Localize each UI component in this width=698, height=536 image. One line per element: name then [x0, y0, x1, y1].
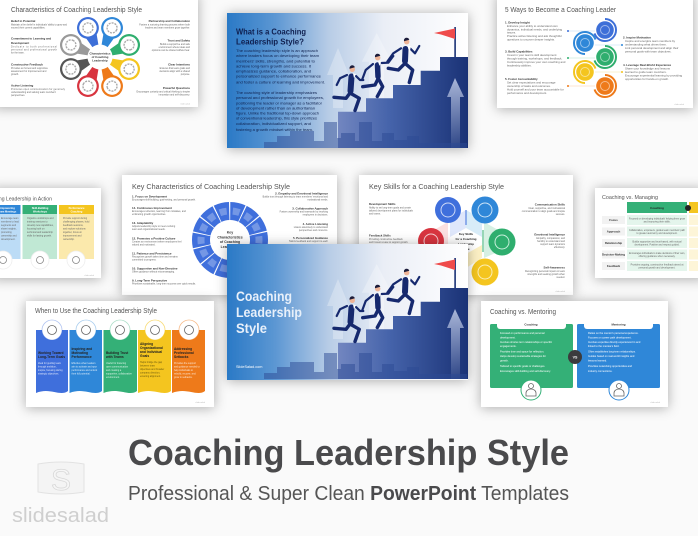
- blue column: members to lead: [1, 220, 19, 224]
- column: long-term goals: Ideal for guiding team: [38, 362, 61, 365]
- right skills: needed.: [556, 276, 565, 279]
- right labels: decisions align with a shared: [159, 70, 191, 73]
- cover website: SlideSalad.com: [236, 365, 262, 369]
- left list: 11. Patience and Persistence: [132, 252, 172, 256]
- right labels: purpose.: [181, 73, 190, 76]
- column: long-term goals: inspire, focusing during: [38, 369, 63, 372]
- slidesalad logo: [12, 462, 109, 527]
- column: inspiring performance: Inspiring and: [72, 347, 92, 351]
- coaching panel: Tailored to specific goals or challenges.: [500, 364, 545, 368]
- blue column: promoting: [1, 231, 12, 234]
- hexagon skill diagram: [418, 196, 516, 286]
- left steps: ownership of tasks and outcomes.: [507, 84, 551, 88]
- cover title: [236, 289, 302, 336]
- heading: Leadership Style?: [236, 36, 304, 46]
- column: aligning goals: and Individual: [140, 350, 162, 354]
- left labels: assessment for improvement and: [11, 70, 47, 73]
- comparison table: Provides ongoing, constructive feedback aimed at: [631, 264, 684, 266]
- green column: Workshops: [33, 210, 48, 214]
- left labels: Maintain a firm belief in individuals' ability to grow and: [11, 24, 68, 26]
- body text: of conventional leadership, this style prioritizes: [236, 116, 317, 120]
- right list: 3. Collaborative Approach: [292, 206, 328, 210]
- column: building trust: [104, 320, 137, 393]
- comparison table: Encourages individuals to make decisions of their own,: [629, 252, 685, 255]
- column: professional setbacks: [172, 320, 205, 393]
- right skills: success.: [556, 213, 565, 216]
- slide title: Coaching vs. Managing: [602, 195, 658, 201]
- left list: Encourages reflection, learning from mistakes, and: [132, 210, 186, 213]
- column: inspiring performance: Motivating: [72, 351, 88, 355]
- left list: Prioritizes sustainable, long-term success over quick results.: [132, 282, 196, 286]
- mentoring panel: Guides based on real-world insights and: [588, 354, 635, 358]
- column: professional setbacks: Setbacks: [174, 355, 189, 359]
- column: aligning goals: Goals: [140, 354, 149, 358]
- yellow column: challenging phases, hold: [63, 220, 90, 224]
- left list: embracing growth opportunities.: [132, 213, 166, 216]
- coaching panel: Coaching: [524, 322, 538, 326]
- left labels: for the team.: [11, 52, 25, 54]
- column: building trust: open communication: [106, 366, 129, 368]
- left skills: Feedback Skills: [369, 234, 391, 238]
- column: building trust: Useful for fostering: [106, 362, 127, 365]
- mentoring panel: linked to the mentee's field.: [588, 344, 620, 348]
- left skills: Providing constructive feedback: [369, 238, 404, 241]
- body text: members' skills, strengths, and potential to: [236, 58, 315, 63]
- left list: [132, 194, 196, 286]
- right steps: 2. Inspire Motivation: [623, 36, 651, 40]
- cover title: Leadership: [236, 305, 302, 320]
- slide title: When to Use the Coaching Leadership Style: [35, 308, 157, 315]
- segmented wheel: Characteristics: [217, 236, 243, 240]
- left list: Adjusts leadership style to meet evolving: [132, 225, 176, 228]
- hexagon skill diagram: for a Coaching: [455, 237, 477, 241]
- left labels: [11, 19, 68, 97]
- comparison table: to greater autonomy and development.: [636, 232, 678, 235]
- coaching panel: Provides time and space for reflection.: [500, 350, 544, 354]
- right labels: Powerful Questions: [163, 86, 190, 90]
- column: long-term goals: Working Toward: [38, 351, 64, 355]
- comparison table: Collaborative, empowers, guides team members' path: [629, 229, 686, 232]
- left skills: tailored development plans for individuals: [369, 210, 414, 212]
- slide: five ways to become a coaching leader: slidesalad: [674, 104, 685, 106]
- left labels: Development: [11, 41, 29, 45]
- coaching panel: [490, 320, 573, 400]
- left steps: dynamics, individual needs, and underlying: [507, 28, 563, 32]
- comparison table: Builds supportive and trust-based, with mutual: [633, 240, 682, 244]
- right skills: Self-Awareness: [544, 266, 565, 270]
- mentoring panel: Provides networking opportunities and: [588, 364, 633, 368]
- right skills: Empathy, compassion, and: [536, 237, 566, 240]
- segmented wheel: Key: [227, 230, 233, 234]
- yellow column: improvement and: [63, 234, 82, 238]
- slide: when to use the coaching leadership style: slidesalad: [195, 402, 206, 404]
- radial diagram: Leadership: [92, 58, 108, 62]
- body text: achieve long-term growth and success. It: [236, 63, 312, 68]
- left list: 13. Adaptability: [132, 221, 154, 225]
- coaching panel: Involves shorter-term relationships or specific: [500, 340, 553, 344]
- right skills: Emotional Intelligence: [534, 232, 565, 236]
- right skills: Recognizing personal impact on team: [525, 270, 565, 273]
- right list: 5. Personalized Guidance: [293, 236, 328, 240]
- left labels: Constructive Feedback: [11, 62, 43, 66]
- column: building trust: with Teams: [105, 355, 124, 359]
- column: aligning goals: Organizational: [140, 346, 163, 350]
- right list: Builds trust through listening to team members' emotional and: [263, 196, 329, 198]
- right list: [263, 192, 329, 243]
- right skills: effectively.: [554, 246, 565, 249]
- slide: when to use the coaching leadership style: [26, 301, 214, 407]
- mentoring panel: [577, 320, 660, 400]
- right labels: Trust and Safety: [168, 38, 190, 42]
- green column: develop new capabilities,: [27, 224, 54, 227]
- body text: emphasizes guidance, collaboration, and: [236, 68, 311, 74]
- hexagon skill diagram: Key Skills: [459, 232, 473, 236]
- column: aligning goals: objectives and broader: [140, 368, 164, 371]
- right labels: leaders and team members grow together.: [145, 26, 190, 30]
- column: aligning goals: [138, 320, 171, 393]
- green column: skills for lasting growth.: [27, 234, 52, 238]
- left steps: through training, workshops, and feedback.: [507, 56, 562, 60]
- slide: key characteristics of coaching leadership: [122, 175, 337, 295]
- column: inspiring performance: performance and unlock: [72, 369, 98, 372]
- blue column: Encourage team: [1, 217, 19, 220]
- slidesalad logo: S: [51, 464, 71, 497]
- right labels: [136, 19, 191, 96]
- right steps: [623, 36, 682, 81]
- subtitle: Professional & Super Clean PowerPoint Templates: [128, 483, 569, 505]
- left steps: 3. Build Capabilities: [505, 50, 533, 54]
- left labels: Promotes open communication for genuinely: [11, 88, 66, 91]
- right steps: Inspire and energize team members by: [625, 39, 676, 43]
- left steps: Enhance your ability to understand own: [507, 24, 558, 28]
- yellow column: [59, 205, 94, 269]
- right list: 4. Active Listening: [303, 222, 328, 226]
- right labels: Encourages curiosity and critical thinking to inspire: [136, 90, 191, 94]
- green column: training sessions to: [27, 220, 48, 224]
- left steps: Practice active listening and ask thoughtful: [507, 34, 562, 38]
- right skills: Clear, supportive, and motivational: [528, 207, 565, 210]
- column: professional setbacks: Addressing: [174, 347, 192, 351]
- left skills: [369, 202, 414, 244]
- column: building trust: environment.: [106, 376, 120, 379]
- slide: key skills for a coaching leadership style: slidesalad: [555, 291, 566, 293]
- blue column: segments and: [1, 224, 17, 227]
- slidesalad logo: slidesalad: [12, 505, 109, 527]
- left list: team and organizational needs.: [132, 228, 166, 231]
- body text: fostering a growth mindset within the team.: [236, 127, 313, 132]
- left steps: Set clear expectations and encourage: [507, 80, 556, 84]
- left list: Recognizes growth takes time and remains: [132, 256, 179, 258]
- slide: coaching vs mentoring: [481, 301, 668, 407]
- column: inspiring performance: Performance: [72, 355, 92, 359]
- slide title: Characteristics of Coaching Leadership Style: [11, 7, 142, 14]
- column: long-term goals: Long-Term Goals: [38, 355, 65, 359]
- column: professional setbacks: rebuild, recover, and: [174, 372, 196, 376]
- right steps: Link personal development and align their: [625, 46, 679, 50]
- slide: key skills for a coaching leadership style: [359, 175, 573, 295]
- comparison table: personal growth and development.: [639, 266, 676, 270]
- yellow column: Performance: [69, 206, 85, 210]
- green column: focusing both on: [27, 228, 45, 230]
- column: aligning goals: between team: [140, 364, 155, 368]
- left labels: Active Listening: [11, 84, 34, 88]
- left labels: Belief in Potential: [11, 19, 35, 23]
- vs badge: VS: [573, 356, 578, 360]
- column: aligning goals: Aligning: [140, 342, 153, 346]
- left steps: performance and development.: [507, 91, 547, 95]
- right list: Tailors feedback and support to each: [289, 240, 329, 243]
- left list: 9. Long-Term Perspective: [132, 278, 168, 282]
- yellow column: Provide support during: [63, 217, 88, 220]
- comparison table: and improving their skills.: [644, 220, 671, 224]
- slide: what is a coaching leadership style: [227, 13, 468, 148]
- right labels: Clear Intentions: [168, 62, 190, 66]
- slide: characteristics of coaching leadership: [0, 0, 198, 107]
- radial diagram: Characteristics: [90, 52, 111, 56]
- right steps: learned to guide team members.: [625, 70, 667, 74]
- yellow column: together, focus on: [63, 231, 83, 234]
- segmented wheel: Leadership: [221, 245, 239, 249]
- body text: The coaching leadership style is an approach: [236, 48, 318, 53]
- left labels: personal and professional growth: [11, 48, 58, 52]
- comparison table: development. Positive and respect guided.: [634, 244, 680, 246]
- right list: Fosters ownership and teamwork by involving: [280, 210, 329, 214]
- right steps: Encourage experiential learning by providing: [625, 74, 682, 78]
- chain of circles: [567, 19, 623, 97]
- stair climbing illustration: [264, 27, 468, 148]
- right steps: opportunities for hands-on growth.: [625, 77, 669, 81]
- left labels: Dedicate to both professional: [11, 46, 57, 48]
- slide title: 5 Ways to Become a Coaching Leader: [505, 7, 617, 14]
- green column: Organize workshops and: [27, 217, 54, 220]
- comparison table: [602, 202, 698, 271]
- left steps: 1. Develop Insight: [505, 20, 530, 24]
- green column: Skill-Building: [32, 206, 49, 210]
- right skills: support team dynamics: [540, 243, 566, 246]
- left steps: questions to uncover deeper insights.: [507, 37, 555, 41]
- column: professional setbacks: Provides the support: [174, 362, 196, 365]
- mentoring panel: Involves expertise directly experienced in and: [588, 340, 641, 344]
- left steps: leadership abilities.: [507, 64, 532, 68]
- left steps: Invest in your team's skill development: [507, 53, 557, 57]
- main title: Coaching Leadership Style: [128, 432, 569, 473]
- green column: [22, 205, 57, 269]
- left list: 12. Promotes a Positive Culture: [132, 236, 176, 240]
- right skills: humility to understand and: [537, 240, 566, 243]
- coaching panel: engagements.: [500, 344, 517, 348]
- green column: technical and leadership: [27, 231, 53, 234]
- body text: where leaders focus on developing their team: [236, 53, 319, 58]
- blue column: share insights,: [1, 228, 17, 230]
- right steps: Share your knowledge and lessons: [625, 66, 671, 70]
- right list: 2. Empathy and Emotional Intelligence: [275, 192, 328, 196]
- body text: personalized support to enhance performance: [236, 74, 321, 78]
- coaching panel: Helps develop sustainable strategies for: [500, 354, 546, 358]
- mentoring panel: Relies on the mentor's personal experience.: [588, 331, 639, 335]
- left labels: perspectives.: [11, 94, 25, 97]
- right steps: understanding what drives them.: [625, 42, 667, 46]
- coaching panel: Encourages skill-building and self-discovery.: [500, 369, 551, 373]
- coaching panel: development.: [500, 336, 516, 340]
- left labels: exceed their current capabilities.: [11, 26, 46, 30]
- slide title: Key Characteristics of Coaching Leadership Style: [132, 184, 290, 191]
- mentoring panel: lessons learned.: [588, 358, 607, 362]
- right skills: Communication Skills: [535, 202, 565, 206]
- mentoring panel: Mentoring: [612, 322, 626, 326]
- slide: coaching vs managing: [595, 188, 698, 278]
- comparison table: Coaching: [650, 206, 664, 210]
- radial diagram: [58, 15, 142, 99]
- mentoring panel: Often establishes long-term relationships.: [588, 350, 636, 354]
- column: professional setbacks: and guidance needed to: [174, 366, 200, 368]
- comparison table: Focus: [609, 218, 618, 222]
- left skills: and teams.: [369, 212, 381, 216]
- right skills: [522, 202, 566, 279]
- column: long-term goals: through ambition,: [38, 366, 57, 368]
- column: professional setbacks: Professional: [174, 351, 194, 355]
- right steps: 4. Leverage Real-World Experience: [623, 63, 672, 67]
- left list: 14. Continuous Improvement: [132, 206, 172, 210]
- column: long-term goals: [36, 320, 68, 393]
- column: aligning goals: company direction,: [140, 372, 160, 374]
- right skills: strengths and seeking growth when: [527, 273, 566, 276]
- column: inspiring performance: [70, 320, 102, 393]
- left labels: growth.: [11, 73, 19, 76]
- slide title: Key Skills for a Coaching Leadership Style: [369, 184, 504, 191]
- body text: and foster a culture of learning and improvement.: [236, 80, 325, 84]
- radial diagram: of Coaching: [92, 55, 109, 59]
- right list: perspectives and concerns.: [299, 229, 328, 232]
- yellow column: ownership.: [63, 238, 75, 241]
- right steps: personal goals with team objectives.: [625, 50, 672, 54]
- segmented wheel: [195, 205, 265, 275]
- left list: Encourages skill-building, goal-setting, and personal growth.: [132, 198, 196, 202]
- vs badge: [568, 350, 582, 364]
- right skills: communication to align goals and inspire: [522, 210, 566, 213]
- column: inspiring performance: their full potential.: [72, 372, 91, 376]
- heading: What is a Coaching: [236, 26, 306, 36]
- body text: positioning the leader or manager as a facilitator: [236, 100, 323, 106]
- left labels: Provides an honest and supportive: [11, 67, 48, 70]
- slide: characteristics of coaching leadership: slidesalad: [180, 104, 191, 106]
- column: building trust: Building Trust: [106, 351, 129, 355]
- column: long-term goals: strategic objectives.: [38, 372, 59, 376]
- right labels: Fosters a nurturing learning process where both: [139, 24, 191, 26]
- column: aligning goals: ensuring alignment.: [140, 375, 161, 378]
- heading: [236, 26, 306, 46]
- left skills: Ability to set long-term goals and create: [369, 206, 412, 210]
- left list: committed to progress.: [132, 258, 157, 262]
- body text: [236, 48, 325, 132]
- cover title: Coaching: [236, 289, 292, 304]
- stair climbing illustration: [264, 258, 468, 379]
- column: professional setbacks: grow in setbacks.: [174, 376, 193, 379]
- left skills: and honest review to support growth.: [369, 241, 409, 244]
- right labels: Builds a supportive and safe: [160, 43, 191, 46]
- left steps: issues.: [507, 30, 516, 34]
- coaching panel: Focused on performance and personal: [500, 331, 545, 335]
- slide: cover: [227, 244, 468, 380]
- right list: Listens attentively to understand: [294, 226, 329, 229]
- right list: employees in decisions.: [303, 214, 328, 216]
- blue column: ownership and: [1, 234, 17, 238]
- mentoring panel: Focuses on career path development.: [588, 336, 632, 340]
- body text: figure. Unlike the traditional top-down approach: [236, 110, 319, 116]
- comparison table: offering guidance when necessary.: [639, 255, 676, 258]
- left steps: [505, 20, 566, 95]
- left steps: 5. Foster Accountability: [505, 77, 538, 81]
- coaching panel: growth.: [500, 358, 509, 362]
- right labels: innovation and self-discovery.: [159, 94, 190, 96]
- left list: Creates an environment where employees feel: [132, 240, 182, 244]
- body text: personal and professional growth for employees,: [236, 95, 324, 100]
- left labels: Commitment to Learning and: [11, 36, 51, 40]
- column: inspiring performance: aim to activate and spur: [72, 366, 97, 368]
- body text: The coaching style of leadership emphasizes: [236, 90, 317, 95]
- column: building trust: supportive, collaborative: [106, 372, 132, 376]
- right labels: opinions can be shared without fear.: [152, 49, 190, 52]
- comparison table: Feedback: [607, 264, 621, 268]
- segmented wheel: of Coaching: [220, 240, 240, 244]
- left list: 1. Focus on Development: [132, 194, 167, 198]
- left list: 10. Supportive and Non-Directive: [132, 266, 178, 270]
- left labels: understanding and valuing team members': [11, 91, 57, 94]
- body text: of development rather than an authoritarian: [236, 106, 315, 110]
- yellow column: and explore solutions: [63, 228, 86, 230]
- comparison table: Decision-Making: [602, 252, 625, 256]
- yellow column: feedback sessions,: [63, 224, 84, 227]
- slide title: Coaching vs. Mentoring: [490, 309, 556, 316]
- slide: coaching vs mentoring: slidesalad: [650, 402, 661, 404]
- mentoring panel: industry connections.: [588, 369, 613, 373]
- right labels: Partnership and Collaboration: [149, 19, 190, 23]
- hexagon skill diagram: Leadership: [458, 242, 474, 246]
- hexagon skill diagram: Style: [462, 247, 470, 251]
- left steps: Hold yourself and your team accountable for: [507, 88, 564, 92]
- comparison table: Relationship: [605, 241, 622, 245]
- blue column: development.: [1, 238, 16, 241]
- column: professional setbacks: help individuals to: [174, 369, 194, 372]
- body text: collaboration, individualized support, and: [236, 121, 311, 126]
- comparison table: Focused on developing individuals' helping them grow: [629, 218, 685, 220]
- column: building trust: and creating a: [106, 369, 122, 372]
- comparison table: Approach: [607, 230, 620, 234]
- right list: motivational needs.: [307, 198, 328, 202]
- left steps: Continuously improve your own coaching and: [507, 60, 566, 64]
- cover title: Style: [236, 321, 267, 336]
- slide: five ways to become a coaching leader: [497, 0, 693, 108]
- right labels: environment where ideas and: [159, 46, 191, 49]
- slide: coaching leadership in action: slidesalad: [84, 275, 95, 277]
- column: inspiring performance: Effective when leaders: [72, 362, 96, 365]
- left list: Offers guidance without micromanaging.: [132, 270, 175, 274]
- left skills: Development Skills: [369, 202, 396, 206]
- blue column: [0, 205, 20, 269]
- yellow column: Coaching: [71, 210, 83, 214]
- left list: valued and motivated.: [132, 244, 156, 246]
- column: aligning goals: Helps bridge the gap: [140, 361, 163, 364]
- right labels: Ensures that team goals and: [160, 67, 191, 70]
- slide: coaching leadership in action: [0, 188, 101, 278]
